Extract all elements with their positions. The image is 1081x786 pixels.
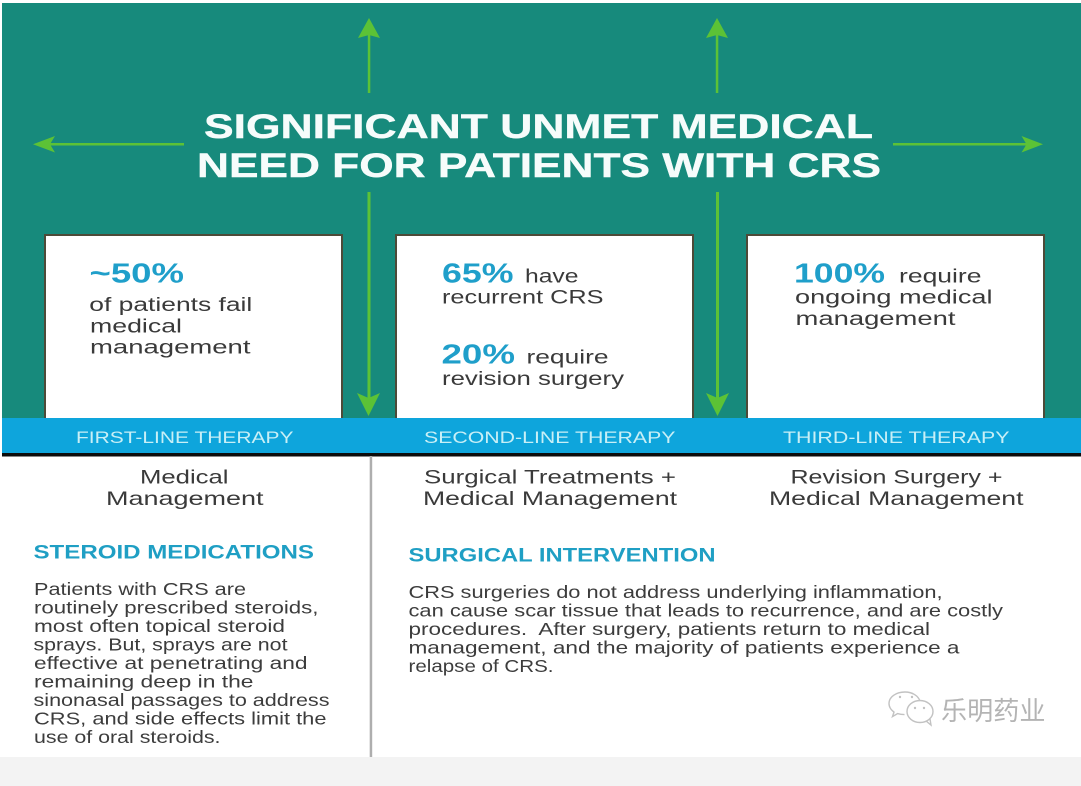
stat: 20% revision: revision surgery	[442, 368, 624, 390]
arrow: left	[33, 136, 184, 152]
panel: first-line card	[45, 235, 342, 425]
text: steroid body: sinonasal passages to address	[34, 690, 330, 710]
text: steroid body: Patients with CRS are	[34, 579, 246, 599]
text: surgical body: management, and the majority of patients experience a	[408, 638, 960, 658]
text: steroid body: routinely prescribed steroids,	[34, 598, 318, 618]
arrow: down left	[357, 192, 380, 416]
stat: 20% revision: require	[526, 346, 609, 368]
text: fail medical management: medical	[90, 316, 182, 338]
text: steroid body: use of oral steroids.	[34, 727, 220, 747]
title	[197, 108, 881, 185]
stat: 65% recurrent	[442, 258, 604, 308]
text: medical management: Management	[106, 488, 264, 510]
label: second-line therapy: SECOND-LINE THERAPY	[424, 428, 676, 447]
stat: 100% ongoing: management	[796, 308, 956, 330]
black rule	[2, 453, 1081, 456]
text: steroid body	[34, 579, 330, 747]
arrow: down right	[706, 192, 729, 416]
stat: 100% ongoing: 100%	[794, 258, 885, 288]
text: revision surgery: Medical Management	[769, 488, 1024, 510]
heading: surgical intervention: SURGICAL INTERVENTION	[408, 546, 716, 566]
text: revision surgery	[769, 466, 1024, 510]
text: fail medical management: of patients fail	[89, 294, 252, 316]
text: medical management: Medical	[140, 466, 228, 488]
label: third-line therapy: THIRD-LINE THERAPY	[783, 428, 1010, 447]
icon: wechat watermark	[889, 692, 933, 725]
text: fail medical management	[89, 294, 252, 358]
text: steroid body: sprays. But, sprays are not	[34, 634, 288, 654]
stat: 20% revision	[442, 338, 624, 390]
stat: 50%: ~50%	[90, 258, 184, 289]
watermark text: 乐明药业	[941, 691, 1046, 728]
stat: 65% recurrent: have	[525, 266, 579, 288]
panel: therapy band	[2, 418, 1081, 453]
text: surgical body: relapse of CRS.	[408, 656, 554, 676]
stat: 65% recurrent: 65%	[442, 258, 514, 289]
text: medical management	[106, 466, 264, 510]
stat: 65% recurrent: recurrent CRS	[442, 286, 604, 308]
text: steroid body: most often topical steroid	[34, 616, 285, 636]
title: NEED FOR PATIENTS WITH CRS	[197, 147, 881, 185]
text: surgical treatments: Medical Management	[423, 488, 678, 510]
text: steroid body: effective at penetrating and	[34, 653, 308, 673]
panel: third-line card	[747, 235, 1044, 425]
text: surgical treatments: Surgical Treatments +	[424, 466, 676, 488]
text: fail medical management: management	[90, 336, 251, 358]
arrow: up left	[358, 18, 380, 93]
stat: 100% ongoing	[794, 258, 992, 330]
panel: second-line card	[396, 235, 693, 425]
arrow: up right	[706, 18, 728, 93]
vertical divider	[370, 456, 372, 757]
heading: steroid medications: STEROID MEDICATIONS	[34, 542, 314, 564]
label: first-line therapy: FIRST-LINE THERAPY	[76, 428, 294, 447]
stat: 100% ongoing: ongoing medical	[795, 286, 992, 308]
text: surgical body: CRS surgeries do not address underlying inflammation,	[408, 582, 942, 602]
text: revision surgery: Revision Surgery +	[790, 466, 1002, 488]
text: surgical body: can cause scar tissue that leads to recurrence, and are costly	[408, 600, 1003, 620]
text: steroid body: remaining deep in the	[34, 671, 254, 691]
panel: teal header background	[2, 3, 1081, 419]
title: SIGNIFICANT UNMET MEDICAL	[204, 108, 873, 146]
text: steroid body: CRS, and side effects limit the	[34, 708, 326, 728]
panel: page footer strip	[0, 757, 1081, 786]
text: surgical body	[408, 582, 1003, 676]
text: surgical treatments	[423, 466, 678, 510]
stat: 100% ongoing: require	[899, 266, 982, 288]
text: surgical body: procedures. After surgery, patients return to medical	[408, 619, 930, 639]
stat: 20% revision: 20%	[442, 338, 515, 369]
arrow: right	[893, 136, 1043, 152]
